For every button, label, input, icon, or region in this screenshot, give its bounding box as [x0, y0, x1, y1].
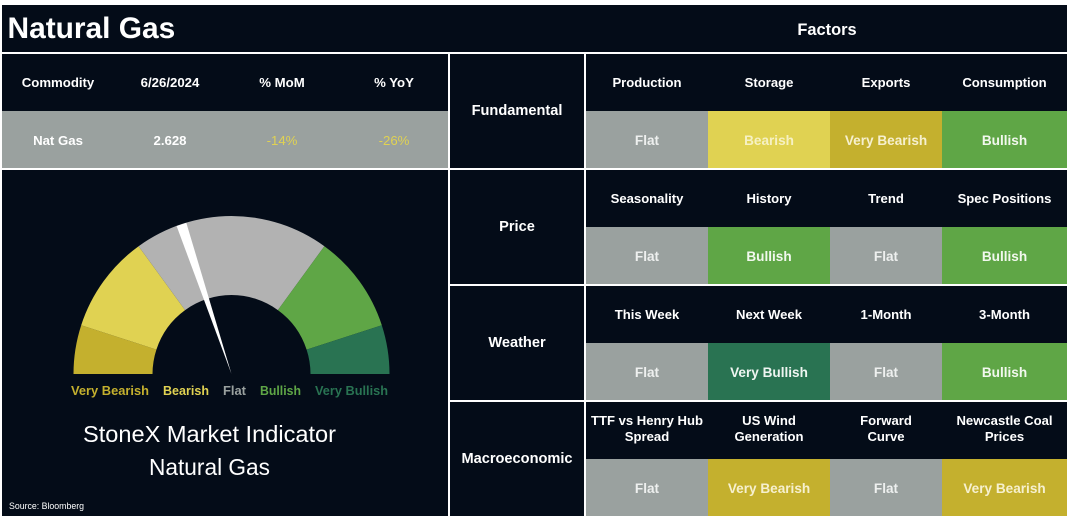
legend: bearish: Bearish — [163, 383, 209, 398]
header: Forward Curve — [830, 402, 942, 459]
legend: very bullish: Very Bullish — [315, 383, 388, 398]
rating: This Week flat: Flat — [635, 364, 659, 380]
rating: Next Week very bullish: Very Bullish — [730, 364, 808, 380]
gauge title line 2: Natural Gas — [149, 454, 270, 480]
category: Weather — [450, 286, 584, 400]
rating: Seasonality flat — [586, 227, 708, 284]
header: 3-Month: 3-Month — [979, 306, 1030, 322]
gauge segment: flat — [139, 216, 324, 310]
rating: Next Week very bullish — [708, 343, 830, 400]
rating: 3-Month bullish — [942, 343, 1067, 400]
header: Forward Curve: Forward — [860, 412, 912, 428]
header: 1-Month: 1-Month — [861, 306, 911, 322]
header: History: History — [746, 190, 792, 206]
rating: Spec Positions bullish — [942, 227, 1067, 284]
category: Macroeconomic — [450, 402, 584, 516]
legend: flat: Flat — [223, 383, 247, 398]
header: Seasonality: Seasonality — [611, 190, 683, 206]
header: US Wind Generation: Generation — [734, 428, 804, 444]
rating: Storage bearish — [708, 111, 830, 168]
panel: gauge — [2, 170, 448, 516]
header: Next Week — [708, 286, 830, 343]
header: TTF vs Henry Hub Spread: Spread — [625, 428, 669, 444]
gauge segment: very bearish — [73, 325, 156, 374]
gauge segment: bearish — [81, 246, 185, 350]
rating: Forward Curve flat — [830, 459, 942, 516]
legend: bullish: Bullish — [260, 383, 301, 398]
header: Exports: Exports — [862, 74, 910, 90]
rating: 1-Month flat — [830, 343, 942, 400]
rating: Consumption bullish: Bullish — [982, 132, 1027, 148]
rating: Trend flat — [830, 227, 942, 284]
rating: Forward Curve flat: Flat — [874, 480, 898, 496]
rating: 3-Month bullish: Bullish — [982, 364, 1027, 380]
header: This Week: This Week — [615, 306, 679, 322]
rating: Spec Positions bullish: Bullish — [982, 248, 1027, 264]
rating: 1-Month flat: Flat — [874, 364, 898, 380]
rating: Exports very bearish — [830, 111, 942, 168]
column header: Commodity: Commodity — [22, 75, 94, 90]
header: Storage — [708, 54, 830, 111]
legend: very bearish: Very Bearish — [71, 383, 149, 398]
heading: Factors: Factors — [797, 21, 857, 39]
panel: Weather factors — [586, 286, 1067, 400]
header: Newcastle Coal Prices: Prices — [985, 428, 1024, 444]
value: price: 2.628 — [153, 132, 186, 148]
header: Consumption — [942, 54, 1067, 111]
rating: Storage bearish: Bearish — [744, 132, 794, 148]
panel: Price factors — [586, 170, 1067, 284]
header: 1-Month — [830, 286, 942, 343]
header: Spec Positions — [942, 170, 1067, 227]
value: Nat Gas: Nat Gas — [33, 132, 83, 148]
header: TTF vs Henry Hub Spread: TTF vs Henry Hub — [591, 412, 703, 428]
header: This Week — [586, 286, 708, 343]
rating: TTF spread flat — [586, 459, 708, 516]
header: Next Week: Next Week — [736, 306, 802, 322]
rating: US Wind very bearish: Very Bearish — [728, 480, 810, 496]
value: month over month change: -14% — [267, 132, 297, 148]
rating: This Week flat — [586, 343, 708, 400]
category: Fundamental: Fundamental — [472, 103, 562, 119]
legend labels — [71, 383, 388, 398]
header: Exports — [830, 54, 942, 111]
column header: date: 6/26/2024 — [141, 75, 199, 90]
rating: Exports very bearish: Very Bearish — [845, 132, 927, 148]
title: Natural Gas: Natural Gas — [8, 12, 175, 45]
header: Trend — [830, 170, 942, 227]
rating: Trend flat: Flat — [874, 248, 898, 264]
rating: Newcastle Coal very bearish — [942, 459, 1067, 516]
header: Production: Production — [612, 74, 682, 90]
rating: Production flat — [586, 111, 708, 168]
panel: Fundamental factors — [586, 54, 1067, 168]
header: 3-Month — [942, 286, 1067, 343]
column header: % MoM: % MoM — [259, 75, 305, 90]
panel: commodity price table — [2, 54, 448, 168]
gauge segment: bullish — [278, 246, 382, 350]
rating: Newcastle Coal very bearish: Very Bearish — [963, 480, 1046, 496]
header: Storage: Storage — [745, 74, 793, 90]
header: Production — [586, 54, 708, 111]
header: US Wind Generation — [708, 402, 830, 459]
header: History — [708, 170, 830, 227]
gauge title line 1: StoneX Market Indicator — [83, 421, 336, 447]
panel: Macroeconomic factors — [586, 402, 1067, 516]
gauge chart — [9, 216, 390, 511]
value: year over year change: -26% — [379, 132, 409, 148]
rating: US Wind very bearish — [708, 459, 830, 516]
column header: % YoY: % YoY — [374, 75, 414, 90]
rating: History bullish — [708, 227, 830, 284]
header: Seasonality — [586, 170, 708, 227]
rating: Production flat: Flat — [635, 132, 659, 148]
header: TTF vs Henry Hub Spread — [586, 402, 708, 459]
header: Spec Positions: Spec Positions — [958, 190, 1051, 206]
category: Price — [450, 170, 584, 284]
header: Newcastle Coal Prices — [942, 402, 1067, 459]
gauge segment: very bullish — [307, 325, 390, 374]
header: Newcastle Coal Prices: Newcastle Coal — [956, 412, 1053, 428]
rating: History bullish: Bullish — [746, 248, 792, 264]
header: Consumption: Consumption — [962, 74, 1047, 90]
header: Forward Curve: Curve — [867, 428, 905, 444]
category: Fundamental — [450, 54, 584, 168]
rating: Consumption bullish — [942, 111, 1067, 168]
header: Trend: Trend — [868, 190, 904, 206]
gauge title — [83, 421, 336, 480]
title bar — [2, 5, 1067, 52]
gauge needle — [177, 223, 232, 374]
price row — [2, 111, 448, 168]
category: Macroeconomic: Macroeconomic — [461, 451, 573, 467]
rating: Seasonality flat: Flat — [635, 248, 659, 264]
rating: TTF spread flat: Flat — [635, 480, 659, 496]
category: Weather: Weather — [488, 335, 546, 351]
category: Price: Price — [499, 219, 535, 235]
source note: Source: Bloomberg — [9, 501, 84, 511]
header: US Wind Generation: US Wind — [742, 412, 796, 428]
